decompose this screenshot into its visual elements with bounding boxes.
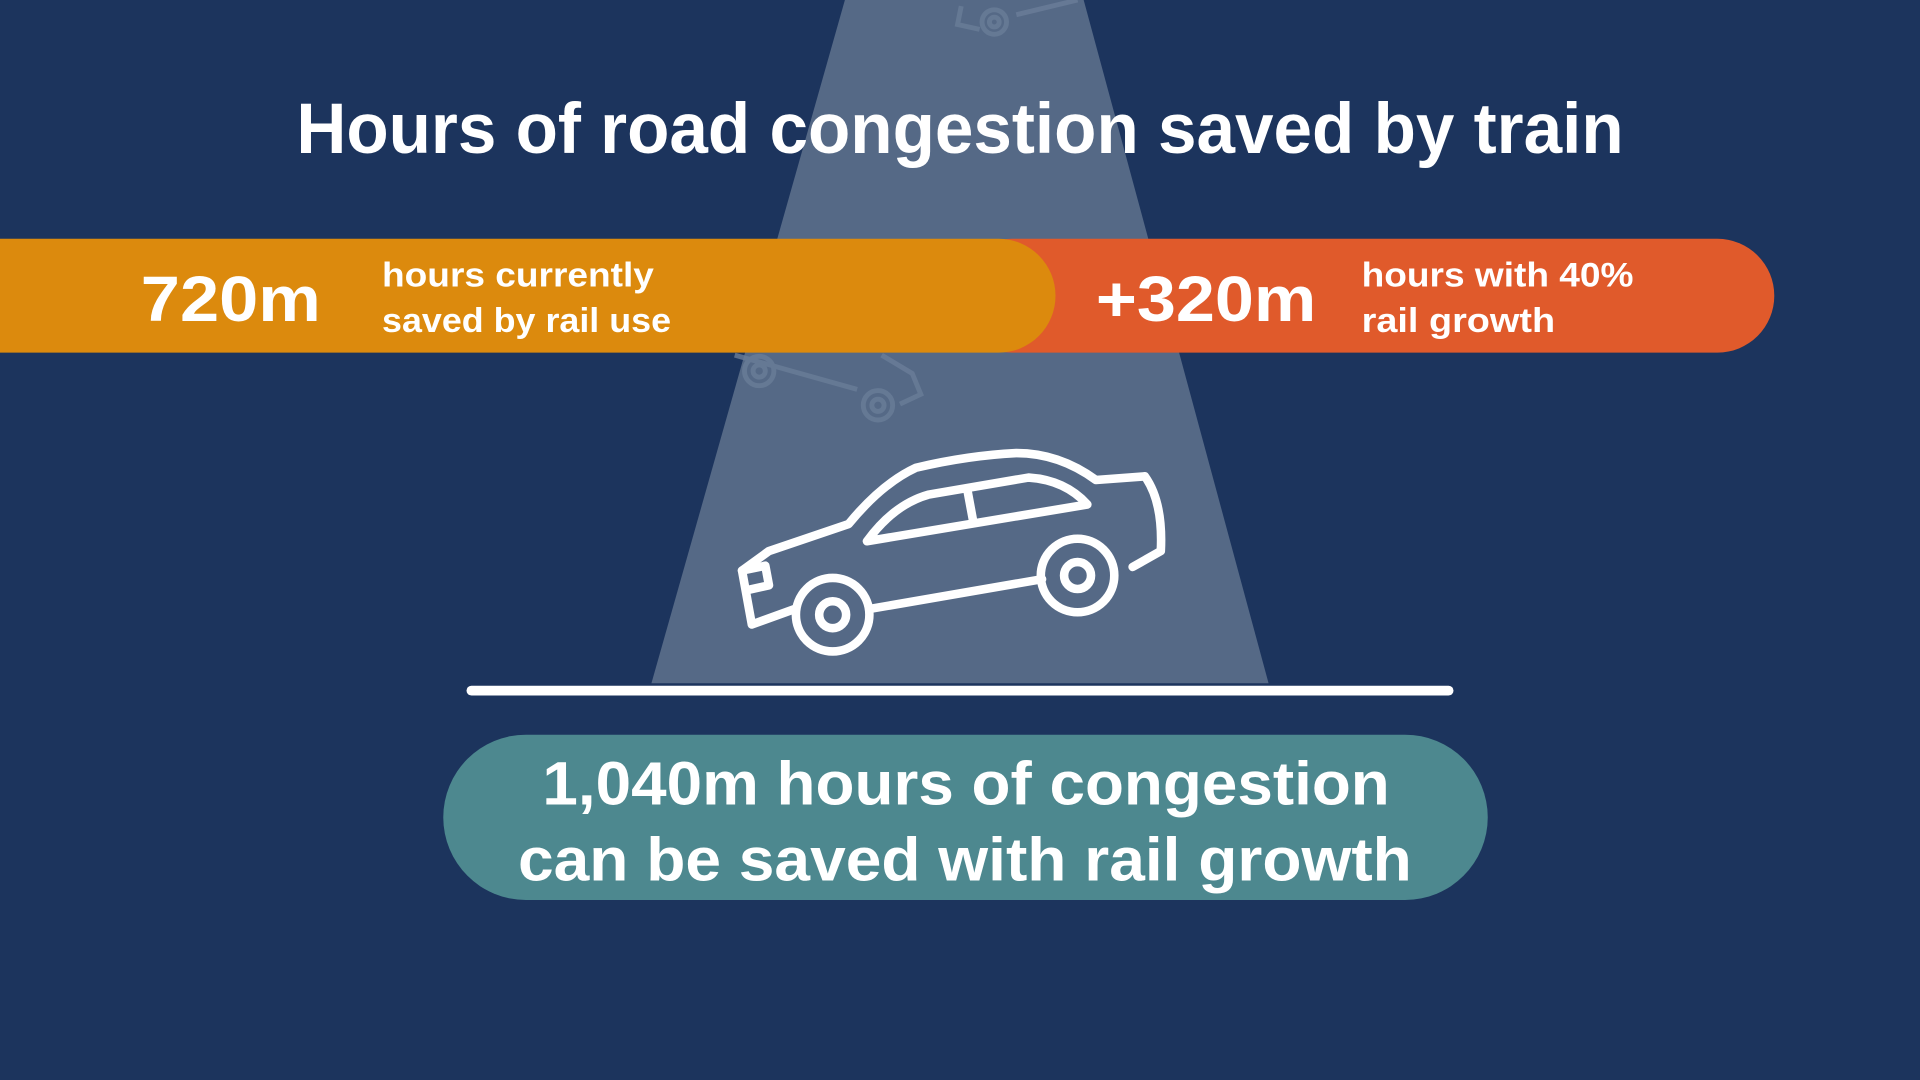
bar: rail growth: rail growth — [1362, 302, 1555, 340]
bar: rail growth: hours with 40% — [1362, 257, 1633, 295]
ground line — [471, 687, 1449, 695]
bar: current rail use: saved by rail use — [382, 302, 671, 340]
summary callout: can be saved with rail growth — [518, 825, 1412, 893]
summary callout: 1,040m hours of congestion — [542, 749, 1390, 817]
icon: car — [742, 453, 1161, 651]
spotlight beam — [651, 0, 1269, 683]
faded cars — [735, 0, 1078, 420]
summary callout — [443, 735, 1488, 900]
title: Hours of road congestion saved by train — [296, 90, 1624, 169]
bar: rail growth — [955, 239, 1774, 353]
bar: current rail use: 720m — [141, 264, 321, 335]
bar: current rail use — [0, 239, 1056, 353]
bar: rail growth: +320m — [1096, 264, 1316, 335]
bar: current rail use: hours currently — [382, 257, 654, 295]
